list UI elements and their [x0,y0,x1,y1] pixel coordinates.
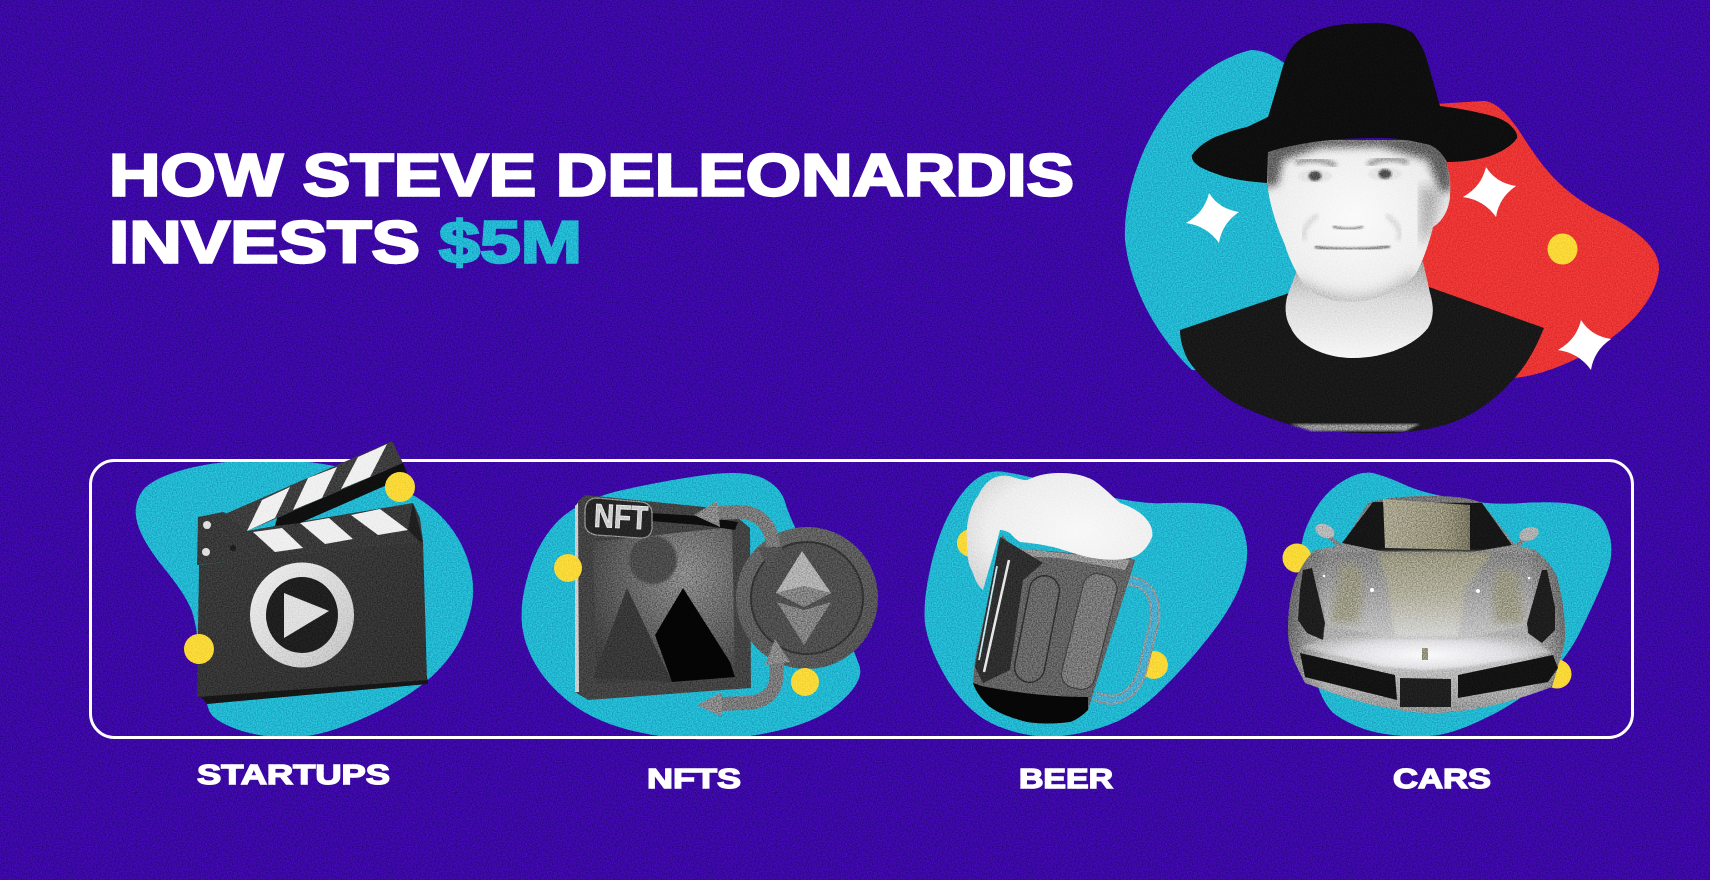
icon: beer mug [957,473,1168,724]
left mirror [1313,521,1340,546]
right mirror [1517,524,1541,546]
left headlight [1298,568,1325,640]
windshield [1342,499,1512,552]
label: cars: CARS [1393,763,1491,794]
swap arrow top [694,501,783,568]
yellow dot left [1282,544,1312,572]
emblem [1422,648,1428,660]
sparkle over shirt edge [1558,320,1611,370]
front lip highlight [1300,627,1552,670]
play ring [250,562,354,668]
yellow dot right [1542,660,1572,688]
red portrait blob [1400,101,1659,378]
foam [967,473,1152,590]
blob behind car icon [1300,473,1611,736]
title: INVESTS [109,210,420,276]
yellow dot top [385,472,415,502]
icon: NFT frame with ethereum coin [554,495,878,717]
left grille [1300,653,1397,700]
mug glass [973,535,1135,724]
car body [1288,496,1565,713]
neck [1286,262,1433,358]
sparkle on red blob [1463,167,1516,217]
rounded frame [90,460,1632,738]
center grille [1400,678,1451,707]
mug handle [1095,581,1155,700]
board body [197,540,428,704]
yellow dot left [184,634,214,664]
upper clapper arm [225,441,407,531]
shirt [1180,287,1544,433]
hat [1192,23,1517,183]
picture frame [575,495,751,700]
label: startups: STARTUPS [197,759,390,790]
label: NFTs: NFTS [647,763,741,794]
blob behind NFT icon [522,473,860,739]
blob behind beer icon [925,471,1247,737]
lower clapper bar [197,503,423,565]
sparkle on cyan blob [1186,193,1239,243]
yellow dot left [554,554,582,582]
yellow dot behind foam [957,529,985,557]
title: $5M [439,210,582,276]
yellow dot right [791,668,819,696]
ethereum coin [736,527,878,669]
face [1262,136,1452,305]
yellow dot behind handle [1140,651,1168,679]
swap arrow bottom [697,639,790,717]
label: beer: BEER [1019,763,1113,794]
portrait cluster [1125,23,1659,433]
right grille [1458,655,1558,698]
cyan portrait blob [1125,50,1300,375]
right headlight [1527,570,1555,643]
icon: sports car [1282,496,1572,715]
hood [1288,549,1565,694]
icon: clapperboard [184,441,428,704]
blob behind startups icon [136,460,473,737]
NFT tag: NFT [593,497,649,536]
yellow dot [1548,234,1578,264]
title: HOW STEVE DELEONARDIS [109,142,1074,208]
title [109,142,1074,276]
